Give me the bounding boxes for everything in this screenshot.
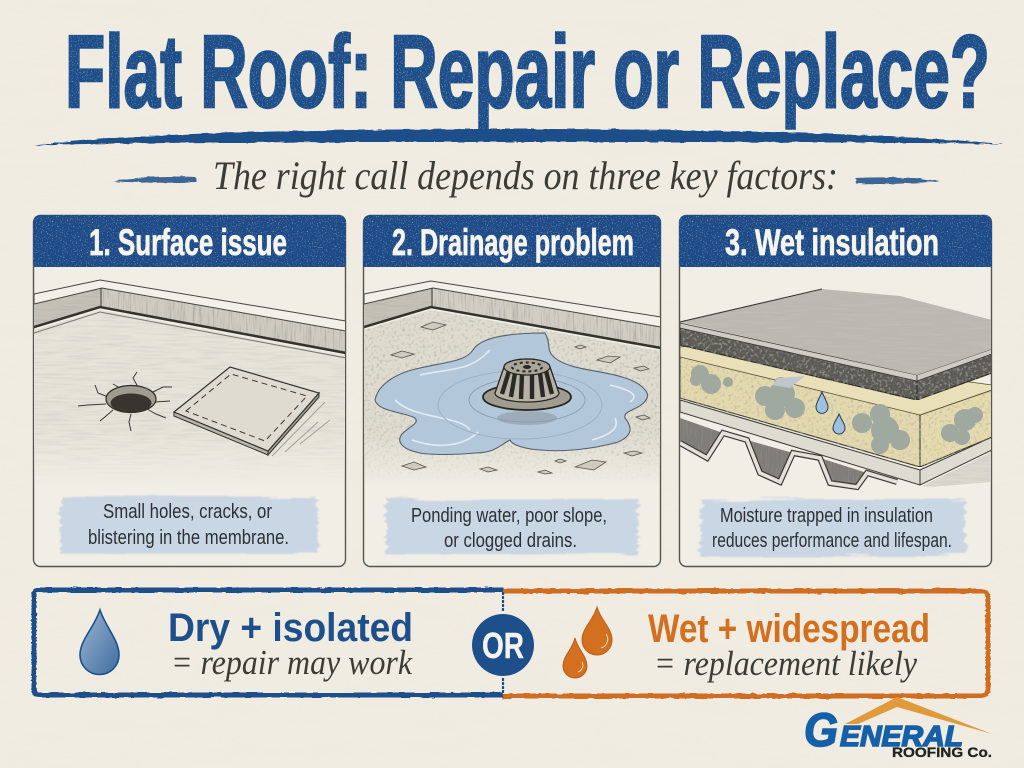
logo: General Roofing Co.: ROOFING Co. — [892, 745, 992, 760]
icon: roof drain — [483, 359, 571, 410]
caption — [701, 500, 965, 555]
debris flecks — [391, 322, 650, 474]
panel: 1. surface issue — [33, 215, 346, 566]
logo: General Roofing Co. — [804, 697, 992, 760]
replace option text: = replacement likely — [654, 644, 917, 683]
card header: 3. Wet insulation — [725, 222, 939, 263]
caption: or clogged drains. — [444, 530, 577, 552]
illustration: ponding water around a drain — [364, 281, 661, 486]
logo: General Roofing Co.: ENERAL — [840, 721, 963, 753]
title underline brush stroke — [34, 129, 1004, 145]
replace option text: Wet + widespread — [648, 607, 930, 651]
icon: water drops — [816, 392, 845, 434]
OR badge: OR — [482, 625, 524, 666]
replace option outline — [503, 591, 988, 696]
repair option text: = repair may work — [171, 643, 413, 682]
icon: blue water drop — [80, 610, 119, 674]
caption: blistering in the membrane. — [88, 527, 289, 549]
caption: Ponding water, poor slope, — [411, 505, 607, 527]
repair option text — [168, 606, 413, 682]
icon: hole with cracks — [78, 372, 172, 431]
water puddle — [375, 333, 648, 454]
card header: 1. Surface issue — [89, 222, 287, 263]
icon: orange water drops — [563, 607, 612, 678]
caption — [60, 497, 318, 553]
caption: Moisture trapped in insulation — [720, 505, 933, 527]
card header — [679, 215, 992, 267]
panel: 2. drainage problem — [363, 215, 661, 566]
repair option text: Dry + isolated — [168, 606, 413, 650]
water stain tear — [772, 376, 805, 388]
panel: decision bar — [34, 590, 988, 696]
illustration: roof surface with hole and patch — [34, 280, 346, 486]
insulation layer — [680, 345, 992, 467]
panel: 3. wet insulation — [679, 215, 992, 566]
caption — [386, 499, 638, 554]
wet patches — [690, 365, 983, 454]
illustration: roof assembly cross-section — [680, 289, 992, 487]
subtitle: The right call depends on three key factors: — [213, 153, 838, 198]
membrane layers — [680, 289, 992, 400]
card header — [33, 215, 346, 267]
logo: General Roofing Co.: G — [804, 703, 838, 756]
repair option outline — [34, 590, 503, 695]
metal deck — [680, 400, 992, 487]
card header: 2. Drainage problem — [392, 222, 634, 263]
card header — [363, 215, 661, 267]
icon: membrane patch — [174, 367, 330, 456]
OR badge — [472, 614, 534, 676]
replace option text — [648, 607, 930, 683]
caption: reduces performance and lifespan. — [712, 530, 952, 552]
caption: Small holes, cracks, or — [103, 501, 272, 523]
